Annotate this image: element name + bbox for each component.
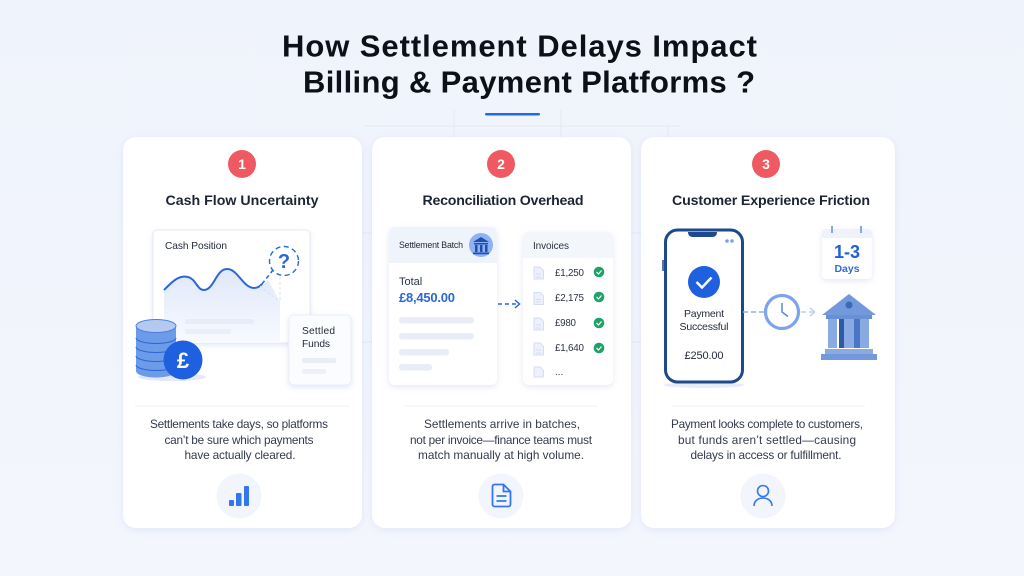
settled funds card: [289, 315, 351, 385]
title underline: [485, 113, 540, 116]
icon: calendar 1-3 days: 1-3: [834, 242, 860, 262]
panel: reconciliation overhead: [372, 137, 631, 528]
description: can’t be sure which payments: [164, 433, 314, 447]
description: Payment looks complete to customers,: [671, 417, 863, 431]
icon: bank: [469, 233, 493, 257]
description: but funds aren’t settled—causing: [678, 433, 856, 447]
number badge 2: 2: [497, 156, 505, 172]
panel: cash flow uncertainty: [123, 137, 362, 528]
settlement batch card: [389, 227, 497, 385]
description: Settlements take days, so platforms: [150, 417, 328, 431]
icon: coin stack: [136, 320, 206, 381]
icon: coin stack: £: [177, 348, 190, 373]
heading: Cash Flow Uncertainty: [166, 193, 319, 209]
number badge 1: 1: [238, 156, 246, 172]
illustration: phone: Payment: [684, 308, 724, 320]
invoice rows: £1,250: [555, 268, 585, 279]
description: have actually cleared.: [184, 448, 296, 462]
number badge 3: [752, 150, 780, 178]
illustration: phone: [663, 230, 744, 388]
icon: calendar 1-3 days: Days: [834, 263, 860, 275]
illustration: cash position chart: Cash Position: [165, 241, 227, 252]
settled funds card: Funds: [302, 339, 330, 350]
invoices card: Invoices: [533, 241, 569, 252]
icon: calendar 1-3 days: [822, 226, 872, 279]
description: delays in access or fulfillment.: [690, 448, 842, 462]
icon: document: [478, 474, 524, 518]
title: Billing & Payment Platforms ?: [303, 64, 755, 100]
heading: Customer Experience Friction: [672, 193, 870, 209]
description: [150, 417, 328, 462]
number badge 2: [487, 150, 515, 178]
icon: bar chart: [216, 474, 262, 518]
invoice rows: £980: [555, 318, 577, 329]
arrow: phone to bank via clock: [743, 308, 815, 316]
arrow: batch to invoices: [498, 300, 520, 308]
illustration: phone: £250.00: [684, 350, 724, 362]
icon: question mark: ?: [278, 251, 290, 273]
invoices card: [523, 232, 613, 385]
invoice rows: £2,175: [555, 293, 585, 304]
settlement batch card: Total: [399, 276, 422, 288]
icon: bank building: [821, 294, 877, 360]
heading: Reconciliation Overhead: [422, 193, 584, 209]
icon: person: [740, 474, 786, 518]
invoice rows: [534, 267, 604, 378]
settlement batch card: Settlement Batch: [399, 240, 463, 250]
panel: customer experience friction: [641, 137, 895, 528]
number badge 1: [228, 150, 256, 178]
settled funds card: Settled: [302, 326, 335, 337]
description: Settlements arrive in batches,: [424, 417, 580, 431]
title: How Settlement Delays Impact: [282, 28, 757, 64]
illustration: cash position chart: [153, 230, 310, 343]
title: [282, 28, 757, 100]
icon: question mark: [270, 246, 298, 276]
description: [671, 417, 863, 462]
description: match manually at high volume.: [418, 448, 584, 462]
invoice rows: ...: [555, 367, 563, 378]
description: not per invoice—finance teams must: [410, 433, 593, 447]
illustration: phone: Successful: [680, 321, 728, 333]
icon: clock: [766, 296, 798, 328]
settlement batch card: £8,450.00: [399, 290, 455, 305]
number badge 3: 3: [762, 156, 770, 172]
description: [410, 417, 593, 462]
invoice rows: £1,640: [555, 343, 585, 354]
